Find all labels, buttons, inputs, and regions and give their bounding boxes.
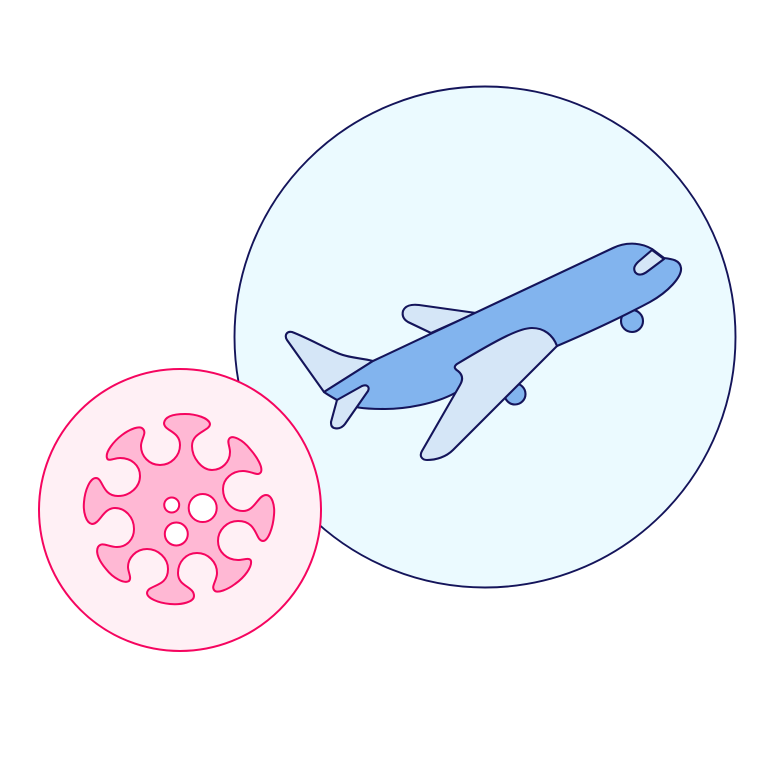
virus hole large: [189, 494, 217, 522]
near engine: [504, 384, 526, 404]
far tail stabilizer: [403, 305, 476, 333]
icon: airplane: [286, 244, 681, 460]
tail fin: [286, 332, 373, 392]
panel: pink circle background: [39, 369, 321, 651]
fuselage: [324, 244, 681, 409]
virus body: [84, 414, 274, 604]
far engine: [621, 310, 643, 332]
panel: blue circle background: [234, 86, 736, 588]
main wing: [421, 328, 557, 460]
icon: virus: [84, 414, 274, 604]
cockpit window: [634, 250, 664, 275]
virus hole small: [164, 498, 179, 512]
near tail stabilizer: [331, 385, 369, 428]
virus hole medium: [165, 522, 188, 546]
